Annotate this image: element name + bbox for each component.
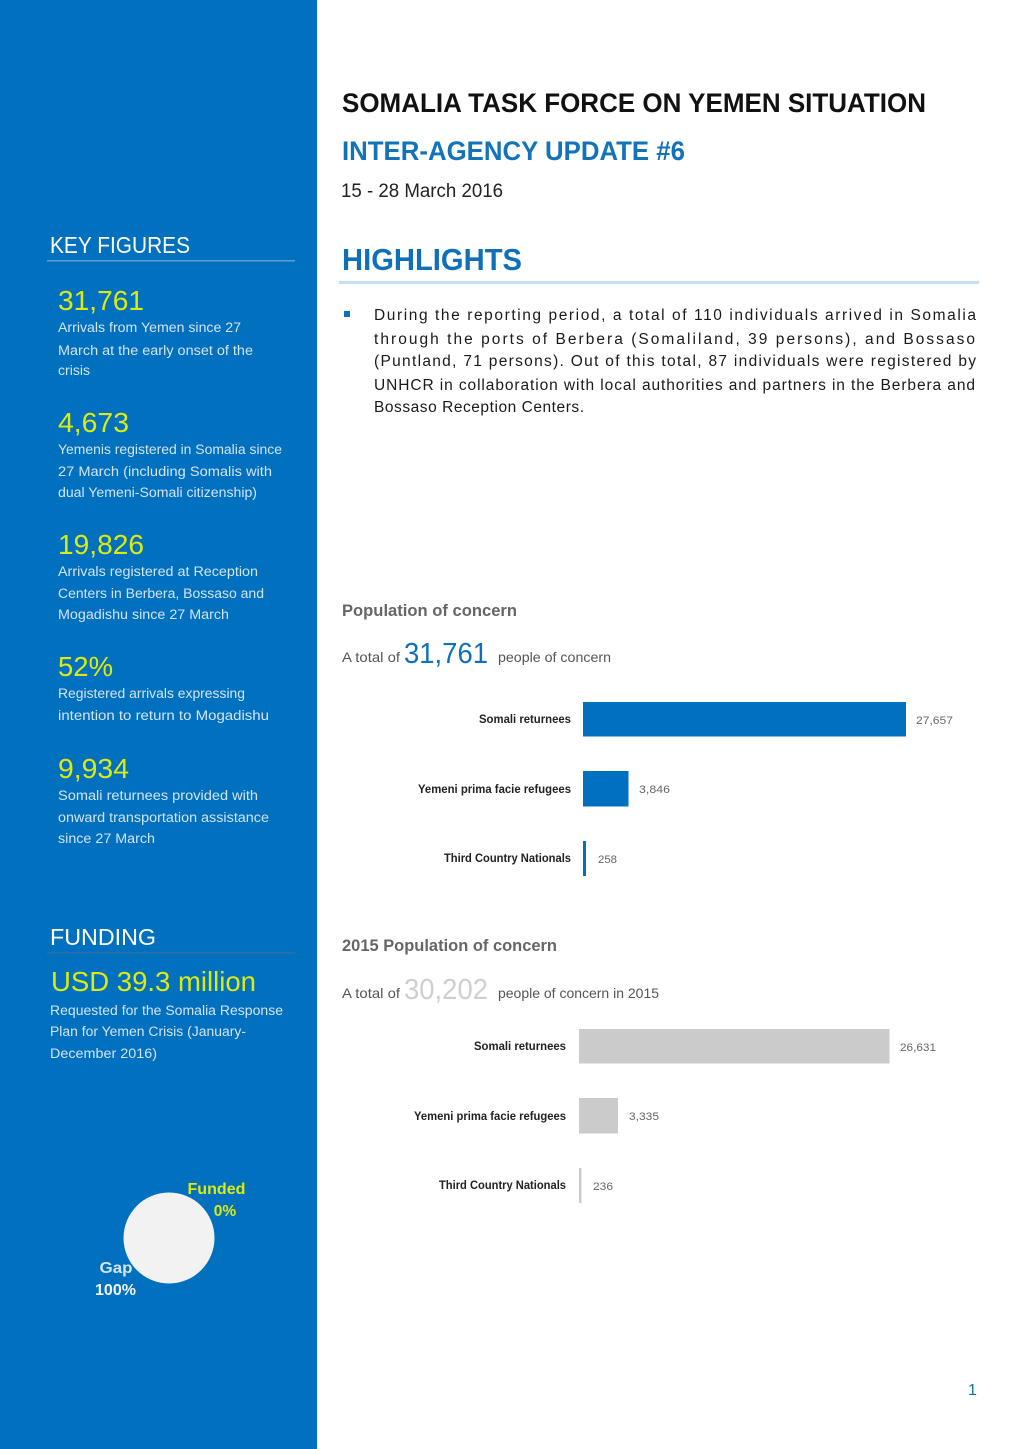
key figure: arrivals from Yemen: March at the early onset of the <box>58 343 253 358</box>
bar: Somali returnees: Somali returnees <box>479 714 571 726</box>
chart heading: 2015 Population of concern <box>342 937 557 955</box>
key figure: arrivals registered at reception centers: Arrivals registered at Reception <box>58 564 258 579</box>
bar: Yemeni prima facie refugees 2015: Yemeni prima facie refugees <box>414 1111 566 1123</box>
key figure: intention to return <box>58 651 269 723</box>
total line <box>342 638 611 670</box>
bar: Yemeni prima facie refugees: 3,846 <box>639 784 670 796</box>
key figure: intention to return: intention to return to Mogadishu <box>58 708 269 723</box>
pie chart: funded vs gap <box>95 1181 246 1299</box>
key figure: arrivals registered at reception centers: 19,826 <box>58 529 144 560</box>
key figure: intention to return: 52% <box>58 651 113 682</box>
bar: Somali returnees 2015: 26,631 <box>900 1042 936 1054</box>
key figure: arrivals from Yemen <box>58 285 253 378</box>
key figure: arrivals registered at reception centers: Centers in Berbera, Bossaso and <box>58 586 264 601</box>
heading: highlights: HIGHLIGHTS <box>342 242 522 277</box>
key figure: Yemenis registered <box>58 407 282 500</box>
highlights bullet text: (Puntland, 71 persons). Out of this total, 87 individuals were registered by <box>374 353 976 370</box>
bar: Third Country Nationals <box>444 841 617 876</box>
key figure: arrivals registered at reception centers <box>58 529 264 622</box>
bar: Yemeni prima facie refugees: Yemeni prima facie refugees <box>418 784 571 796</box>
heading: highlights <box>339 242 979 284</box>
total line: A total of <box>342 985 400 1001</box>
funding description: December 2016) <box>50 1046 157 1061</box>
total line: A total of <box>342 649 400 665</box>
highlights bullet text: Bossaso Reception Centers. <box>374 399 584 416</box>
chart heading: Population of concern <box>342 602 517 620</box>
bar: Third Country Nationals: Third Country Nationals <box>444 853 571 865</box>
bar: Third Country Nationals 2015 <box>439 1168 613 1203</box>
total line: people of concern in 2015 <box>498 985 659 1001</box>
pie chart: funded vs gap: Funded <box>188 1181 246 1198</box>
total line: 30,202 <box>404 974 488 1006</box>
bar: Yemeni prima facie refugees 2015: 3,335 <box>629 1111 659 1123</box>
bar: Somali returnees 2015 <box>474 1029 936 1064</box>
key figure: onward transportation <box>58 753 269 846</box>
pie chart: funded vs gap: 0% <box>214 1203 236 1220</box>
funding description: Requested for the Somalia Response <box>50 1003 283 1018</box>
funding description: Plan for Yemen Crisis (January- <box>50 1024 246 1039</box>
highlights bullet text <box>344 307 976 416</box>
bar: Third Country Nationals: 258 <box>598 854 617 866</box>
bar: Somali returnees <box>479 702 953 736</box>
key figure: Yemenis registered: 27 March (including Somalis with <box>58 464 272 479</box>
bar: Third Country Nationals 2015: Third Country Nationals <box>439 1180 566 1192</box>
chart: 2015 population of concern <box>342 937 936 1203</box>
key figure: Yemenis registered: dual Yemeni-Somali citizenship) <box>58 485 257 500</box>
date: 15 - 28 March 2016 <box>341 181 503 202</box>
funding amount: USD 39.3 million <box>51 966 256 997</box>
key figure: Yemenis registered: 4,673 <box>58 407 129 438</box>
sidebar panel <box>0 0 317 1449</box>
heading: key figures: KEY FIGURES <box>50 232 190 258</box>
total line: people of concern <box>498 649 611 665</box>
key figure: arrivals registered at reception centers: Mogadishu since 27 March <box>58 607 229 622</box>
key figure: onward transportation: 9,934 <box>58 753 129 784</box>
key figure: onward transportation: since 27 March <box>58 831 155 846</box>
total line <box>342 974 659 1006</box>
pie chart: funded vs gap: Gap <box>100 1260 132 1277</box>
key figure: arrivals from Yemen: 31,761 <box>58 285 144 316</box>
page number: 1 <box>968 1382 977 1399</box>
subtitle: INTER-AGENCY UPDATE #6 <box>342 136 685 166</box>
total line: 31,761 <box>404 638 488 670</box>
funding description <box>50 1003 283 1061</box>
key figure: intention to return: Registered arrivals expressing <box>58 686 245 701</box>
title: SOMALIA TASK FORCE ON YEMEN SITUATION <box>342 88 926 118</box>
bar: Third Country Nationals 2015: 236 <box>593 1181 613 1193</box>
key figure: onward transportation: Somali returnees provided with <box>58 788 258 803</box>
highlights bullet text: through the ports of Berbera (Somaliland, 39 persons), and Bossaso <box>374 331 975 348</box>
bar: Yemeni prima facie refugees <box>418 771 670 806</box>
pie chart: funded vs gap: 100% <box>95 1282 136 1299</box>
bar: Somali returnees: 27,657 <box>916 715 953 727</box>
key figure: arrivals from Yemen: crisis <box>58 363 90 378</box>
bar: Somali returnees 2015: Somali returnees <box>474 1041 566 1053</box>
bar: Yemeni prima facie refugees 2015 <box>414 1098 659 1134</box>
highlights bullet text: UNHCR in collaboration with local authorities and partners in the Berbera and <box>374 377 975 394</box>
heading: funding: FUNDING <box>50 924 156 950</box>
key figure: Yemenis registered: Yemenis registered in Somalia since <box>58 442 282 457</box>
key figure: onward transportation: onward transportation assistance <box>58 810 269 825</box>
chart: population of concern <box>342 602 953 876</box>
highlights bullet text: During the reporting period, a total of 110 individuals arrived in Somalia <box>374 307 976 324</box>
key figure: arrivals from Yemen: Arrivals from Yemen since 27 <box>58 320 241 335</box>
